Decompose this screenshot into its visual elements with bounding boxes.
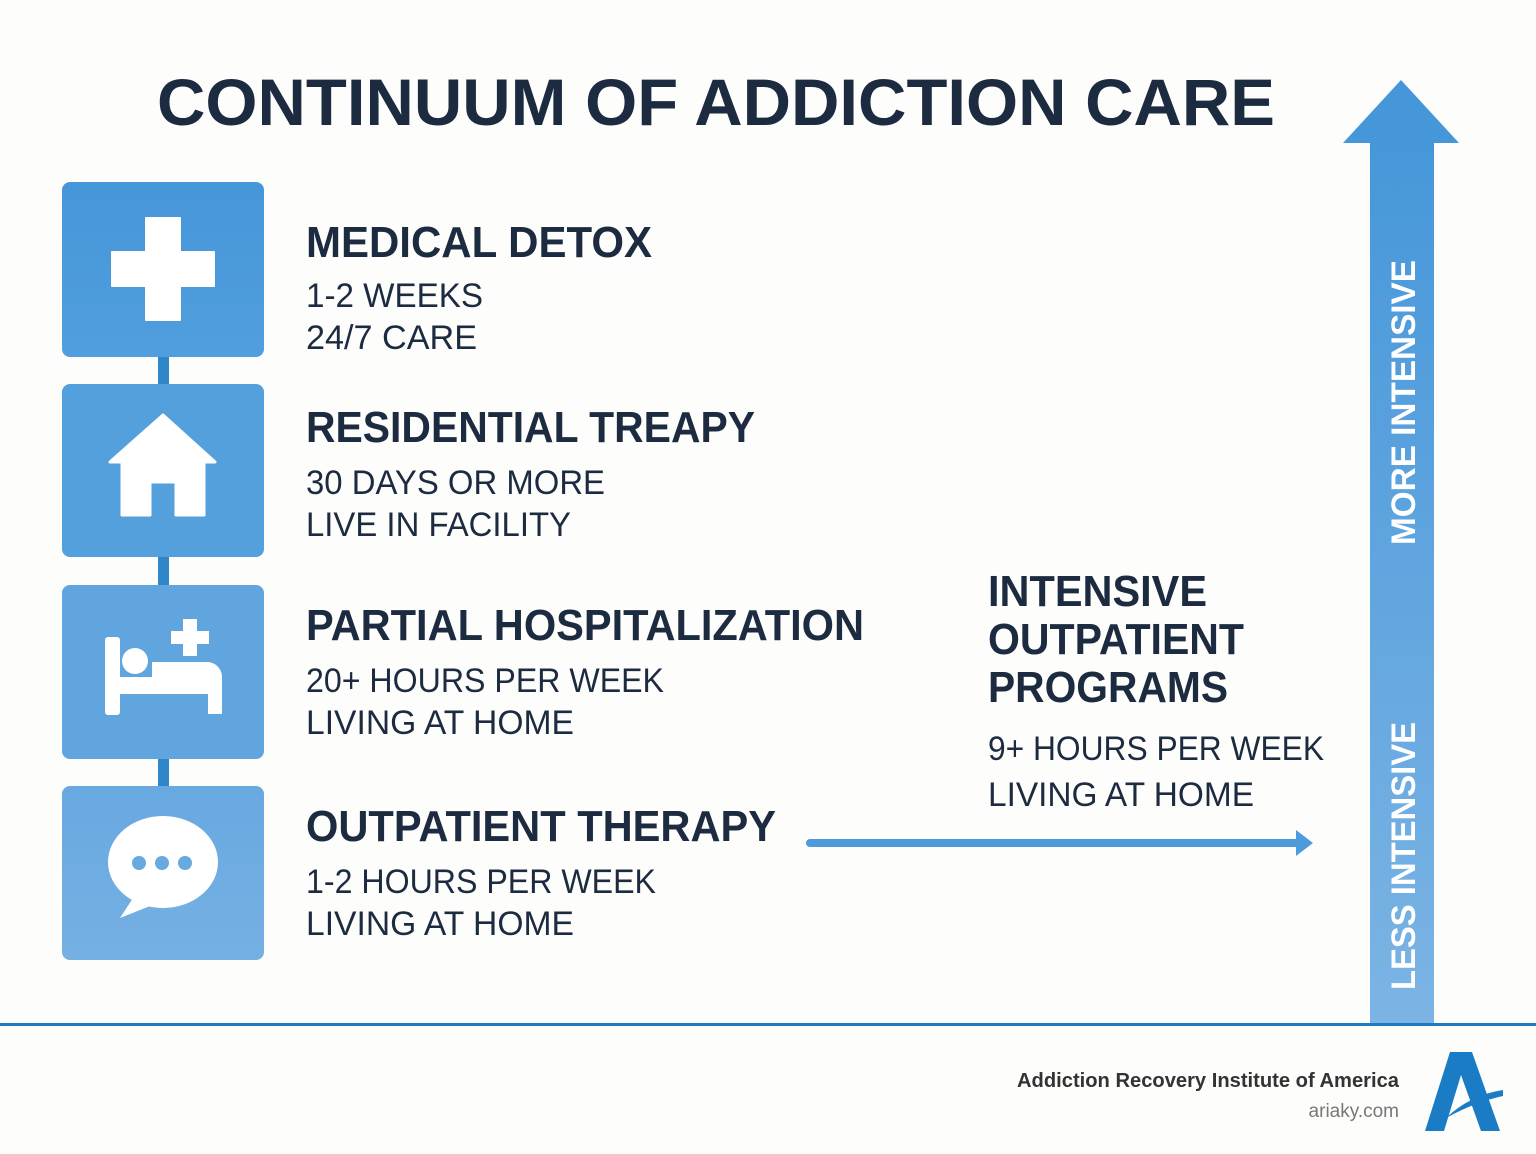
text block: medical detox: 24/7 CARE [306, 319, 477, 357]
text block: residential: RESIDENTIAL TREAPY [306, 403, 755, 452]
text block: residential [306, 403, 755, 544]
text block: outpatient therapy: LIVING AT HOME [306, 905, 574, 943]
icon: house [62, 384, 264, 557]
title: CONTINUUM OF ADDICTION CARE [157, 65, 1275, 139]
logo [1425, 1052, 1503, 1131]
text block: medical detox: 1-2 WEEKS [306, 277, 483, 315]
footer text: ariaky.com [1309, 1101, 1399, 1122]
arrow: horizontal [806, 830, 1313, 856]
text block: medical detox: MEDICAL DETOX [306, 218, 652, 267]
text block: outpatient therapy: 1-2 HOURS PER WEEK [306, 863, 656, 901]
arrow: vertical intensity scale: MORE INTENSIVE [1385, 260, 1423, 545]
text block: partial hospitalization: LIVING AT HOME [306, 704, 574, 742]
text block: residential: 30 DAYS OR MORE [306, 464, 605, 502]
footer text: Addiction Recovery Institute of America [1017, 1070, 1400, 1092]
text block: outpatient therapy: OUTPATIENT THERAPY [306, 802, 776, 851]
icon: medical cross [62, 182, 264, 357]
text block: intensive outpatient [988, 567, 1324, 814]
text block: partial hospitalization [306, 601, 864, 742]
text block: intensive outpatient: 9+ HOURS PER WEEK [988, 730, 1324, 768]
text block: intensive outpatient: LIVING AT HOME [988, 776, 1254, 814]
footer text [1017, 1070, 1400, 1122]
arrow: vertical intensity scale [1343, 80, 1459, 1025]
text block: partial hospitalization: PARTIAL HOSPITALIZATION [306, 601, 864, 650]
text block: partial hospitalization: 20+ HOURS PER WEEK [306, 662, 664, 700]
text block: outpatient therapy [306, 802, 776, 943]
text block: intensive outpatient: PROGRAMS [988, 663, 1228, 712]
arrow: vertical intensity scale: LESS INTENSIVE [1385, 722, 1423, 990]
connector line [158, 350, 169, 790]
icon: speech bubble [62, 786, 264, 960]
text block: residential: LIVE IN FACILITY [306, 506, 571, 544]
text block: intensive outpatient: OUTPATIENT [988, 615, 1244, 664]
icon: hospital bed [62, 585, 264, 759]
text block: intensive outpatient: INTENSIVE [988, 567, 1207, 616]
text block: medical detox [306, 218, 652, 357]
